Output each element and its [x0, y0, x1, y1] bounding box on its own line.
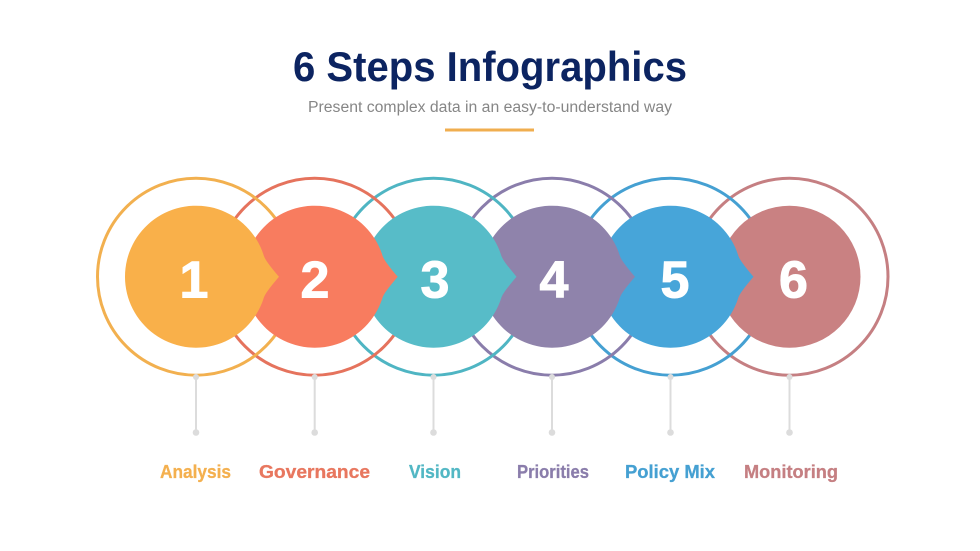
step numbers: 4 — [540, 252, 569, 310]
step 5 disc — [599, 206, 754, 348]
step 1 disc — [125, 206, 279, 348]
step numbers: 1 — [180, 252, 208, 310]
step numbers — [180, 252, 808, 310]
step labels: Vision — [409, 461, 461, 482]
step labels: Priorities — [517, 461, 589, 482]
step numbers: 5 — [661, 252, 689, 310]
step labels: Monitoring — [744, 461, 838, 482]
step 4 disc — [481, 206, 635, 348]
step numbers: 3 — [421, 252, 449, 310]
connector stems — [193, 374, 793, 436]
step labels — [160, 461, 838, 482]
step 6 disc — [718, 206, 860, 348]
step labels: Analysis — [160, 461, 231, 482]
step labels: Governance — [259, 461, 370, 482]
step 2 disc — [244, 206, 398, 348]
title: 6 Steps Infographics — [293, 43, 687, 90]
step 3 disc — [362, 206, 516, 348]
title underline — [445, 128, 534, 132]
step numbers: 2 — [301, 252, 329, 310]
step numbers: 6 — [779, 252, 808, 310]
outer rings — [98, 178, 888, 375]
subtitle: Present complex data in an easy-to-understand way — [308, 99, 672, 116]
step labels: Policy Mix — [625, 461, 716, 482]
